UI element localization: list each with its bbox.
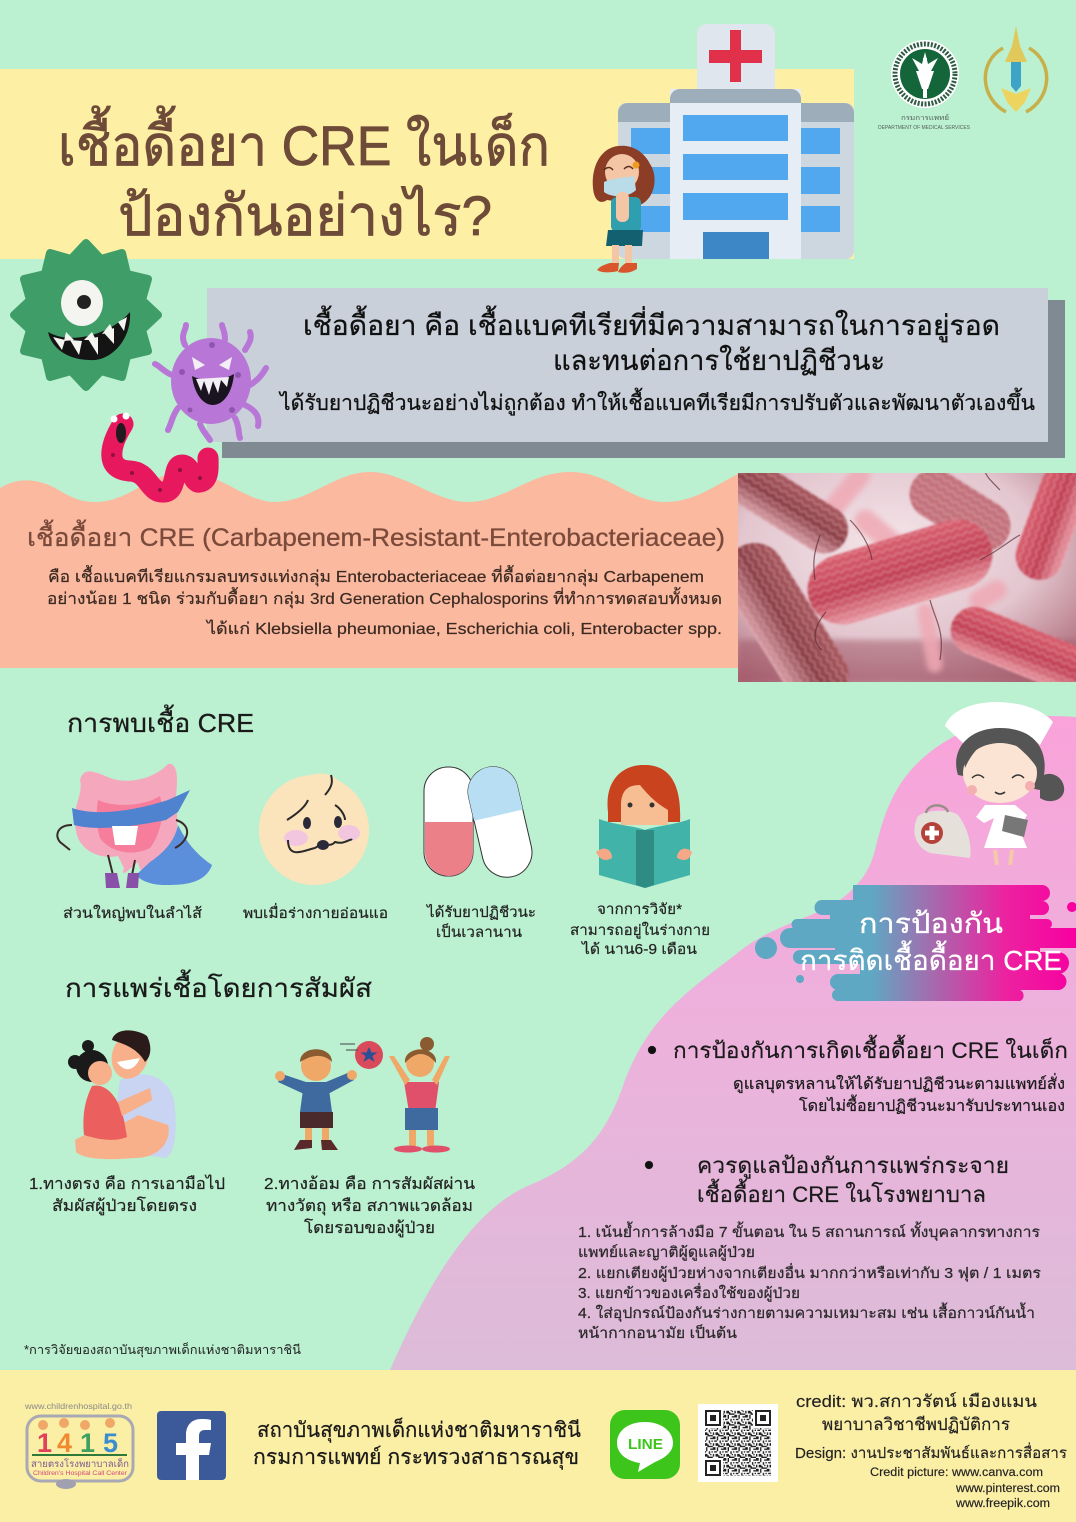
text: transmission captions: 1.ทางตรง คือ การเอามือไป bbox=[29, 1174, 225, 1193]
text: institute: กรมการแพทย์ กระทรวงสาธารณสุข bbox=[253, 1445, 579, 1470]
panel: definition: เชื้อดื้อยา คือ เชื้อแบคทีเรียที่มีความสามารถในการอยู่รอด bbox=[303, 305, 1000, 343]
icon: girl with mask bbox=[593, 146, 655, 273]
text: CRE definition bbox=[27, 519, 725, 638]
panel: footer bbox=[0, 1370, 1076, 1522]
logo: gold emblem bbox=[985, 26, 1047, 112]
text: credits: พยาบาลวิชาชีพปฏิบัติการ bbox=[822, 1415, 1010, 1434]
photo: bacteria bbox=[738, 473, 1076, 682]
text: prevention in children: โดยไม่ซื้อยาปฏิชีวนะมารับประทานเอง bbox=[799, 1094, 1065, 1115]
text: detection captions: ส่วนใหญ่พบในลำไส้ bbox=[63, 904, 202, 922]
logo: ministry of public health: DEPARTMENT OF MEDICAL SERVICES bbox=[878, 125, 970, 131]
title: เชื้อดื้อยา CRE ในเด็ก bbox=[58, 106, 550, 177]
text: transmission captions: 2.ทางอ้อม คือ การสัมผัสผ่าน bbox=[264, 1175, 475, 1193]
logo: 1415 call center: Children's Hospital Call Center bbox=[33, 1470, 128, 1477]
text: CRE definition: ได้แก่ Klebsiella pheumoniae, Escherichia coli, Enterobacter spp. bbox=[205, 619, 722, 638]
text: detection captions: จากการวิจัย* bbox=[597, 902, 682, 918]
text: prevention in hospital: 2. แยกเตียงผู้ป่วยห่างจากเตียงอื่น มากกว่าหรือเท่ากับ 3 ฟุต / 1 เมตร bbox=[578, 1263, 1041, 1282]
panel: prevention heading: การป้องกัน bbox=[859, 908, 1003, 939]
text: institute: สถาบันสุขภาพเด็กแห่งชาติมหาราชินี bbox=[257, 1416, 581, 1443]
icon: weak face bbox=[259, 773, 369, 885]
text: prevention in children: ดูแลบุตรหลานให้ได้รับยาปฏิชีวนะตามแพทย์สั่ง bbox=[733, 1073, 1065, 1094]
icon: purple germ bbox=[155, 325, 266, 440]
text: prevention in hospital: 3. แยกข้าวของเครื่องใช้ของผู้ป่วย bbox=[578, 1283, 800, 1302]
text: prevention in hospital: หน้ากากอนามัย เป็นต้น bbox=[578, 1323, 737, 1342]
text: credits: Credit picture: www.canva.com bbox=[870, 1467, 1043, 1479]
icon: children with ball bbox=[275, 1037, 450, 1152]
text: CRE definition: คือ เชื้อแบคทีเรียแกรมลบทรงแท่งกลุ่ม Enterobacteriaceae ที่ดื้อต่อยากลุ่ม Carbapenem bbox=[48, 565, 704, 587]
icon: QR code bbox=[698, 1404, 778, 1482]
panel: prevention heading bbox=[755, 885, 1076, 1001]
text: prevention in hospital bbox=[578, 1153, 1041, 1342]
text: prevention in hospital: 1. เน้นย้ำการล้างมือ 7 ขั้นตอน ใน 5 สถานการณ์ ทั้งบุคลากรทางการ bbox=[578, 1221, 1040, 1241]
icon: father and daughter bbox=[68, 1029, 176, 1159]
text: credits: www.pinterest.com bbox=[955, 1483, 1060, 1495]
logo: 1415 call center: www.childrenhospital.go.th bbox=[24, 1401, 132, 1411]
text: detection captions: สามารถอยู่ในร่างกาย bbox=[570, 921, 710, 939]
text: prevention in children: การป้องกันการเกิดเชื้อดื้อยา CRE ในเด็ก bbox=[673, 1035, 1068, 1063]
text: transmission captions bbox=[29, 1174, 475, 1238]
panel: CRE band bbox=[0, 472, 740, 668]
logo: ministry of public health: กรมการแพทย์ bbox=[901, 114, 949, 122]
text: detection captions: เป็นเวลานาน bbox=[436, 922, 522, 941]
text: detection captions bbox=[63, 902, 710, 958]
panel: definition: และทนต่อการใช้ยาปฏิชีวนะ bbox=[553, 344, 885, 376]
logo: ministry of public health bbox=[878, 40, 970, 131]
text: detection captions: ได้รับยาปฏิชีวนะ bbox=[426, 903, 536, 921]
text: prevention in children bbox=[648, 1035, 1068, 1115]
panel: title banner bbox=[0, 69, 854, 259]
logo: 1415 call center: 1 bbox=[80, 1428, 95, 1458]
icon: capsules bbox=[424, 762, 537, 882]
text: prevention in hospital: เชื้อดื้อยา CRE ในโรงพยาบาล bbox=[697, 1179, 986, 1207]
icon: nurse bbox=[914, 702, 1064, 865]
text: credits: Design: งานประชาสัมพันธ์และการสื่อสาร bbox=[795, 1442, 1067, 1462]
panel: prevention blob bbox=[390, 716, 1076, 1370]
text: CRE definition: เชื้อดื้อยา CRE (Carbapenem-Resistant-Enterobacteriaceae) bbox=[27, 519, 725, 552]
icon: green germ bbox=[14, 243, 158, 387]
icon: hospital bbox=[618, 24, 854, 259]
text: detection captions: ได้ นาน6-9 เดือน bbox=[581, 940, 697, 958]
icon: line: LINE bbox=[628, 1436, 663, 1453]
text: transmission captions: สัมผัสผู้ป่วยโดยตรง bbox=[52, 1196, 197, 1216]
logo: 1415 call center: 5 bbox=[103, 1428, 118, 1458]
panel: definition: ได้รับยาปฏิชีวนะอย่างไม่ถูกต้อง ทำให้เชื้อแบคทีเรียมีการปรับตัวและพัฒนาตัวเองขึ้น bbox=[278, 388, 1035, 416]
text: transmission captions: ทางวัตถุ หรือ สภาพแวดล้อม bbox=[266, 1197, 473, 1216]
logo: 1415 call center bbox=[24, 1401, 133, 1489]
text: transmission captions: โดยรอบของผู้ป่วย bbox=[304, 1218, 435, 1238]
heading: detection: การพบเชื้อ CRE bbox=[67, 704, 254, 738]
text: institute bbox=[253, 1416, 581, 1470]
panel: definition shadow bbox=[222, 300, 1065, 458]
icon: red worm bbox=[110, 412, 208, 492]
text: prevention in hospital: 4. ใส่อุปกรณ์ป้องกันร่างกายตามความเหมาะสม เช่น เสื้อกาวน์กันน้ำ bbox=[578, 1302, 1035, 1322]
text: credits: credit: พว.สกาวรัตน์ เมืองแมน bbox=[796, 1392, 1037, 1411]
panel: definition bbox=[207, 288, 1048, 442]
text: CRE definition: อย่างน้อย 1 ชนิด ร่วมกับดื้อยา กลุ่ม 3rd Generation Cephalosporins ที่ทำการทดสอบทั้งหมด bbox=[47, 587, 722, 609]
heading: contact transmission: การแพร่เชื้อโดยการสัมผัส bbox=[65, 969, 372, 1003]
icon: reading girl bbox=[596, 765, 692, 888]
footnote: *การวิจัยของสถาบันสุขภาพเด็กแห่งชาติมหาราชินี bbox=[24, 1342, 301, 1358]
text: prevention in hospital: ควรดูแลป้องกันการแพร่กระจาย bbox=[697, 1153, 1009, 1179]
logo: 1415 call center: สายตรงโรงพยาบาลเด็ก bbox=[31, 1457, 129, 1470]
logo: 1415 call center: 4 bbox=[57, 1428, 72, 1458]
logo: 1415 call center: 1 bbox=[37, 1428, 52, 1458]
icon: line bbox=[610, 1410, 680, 1479]
text: prevention in hospital: แพทย์และญาติผู้ดูแลผู้ป่วย bbox=[578, 1244, 755, 1261]
text: detection captions: พบเมื่อร่างกายอ่อนแอ bbox=[243, 903, 388, 922]
text: credits bbox=[795, 1392, 1067, 1510]
text: credits: www.freepik.com bbox=[955, 1498, 1050, 1510]
icon: intestine superhero bbox=[57, 764, 212, 888]
title bbox=[58, 106, 550, 247]
panel: prevention heading: การติดเชื้อดื้อยา CRE bbox=[800, 940, 1062, 976]
icon: facebook bbox=[157, 1411, 226, 1480]
title: ป้องกันอย่างไร? bbox=[118, 184, 492, 247]
